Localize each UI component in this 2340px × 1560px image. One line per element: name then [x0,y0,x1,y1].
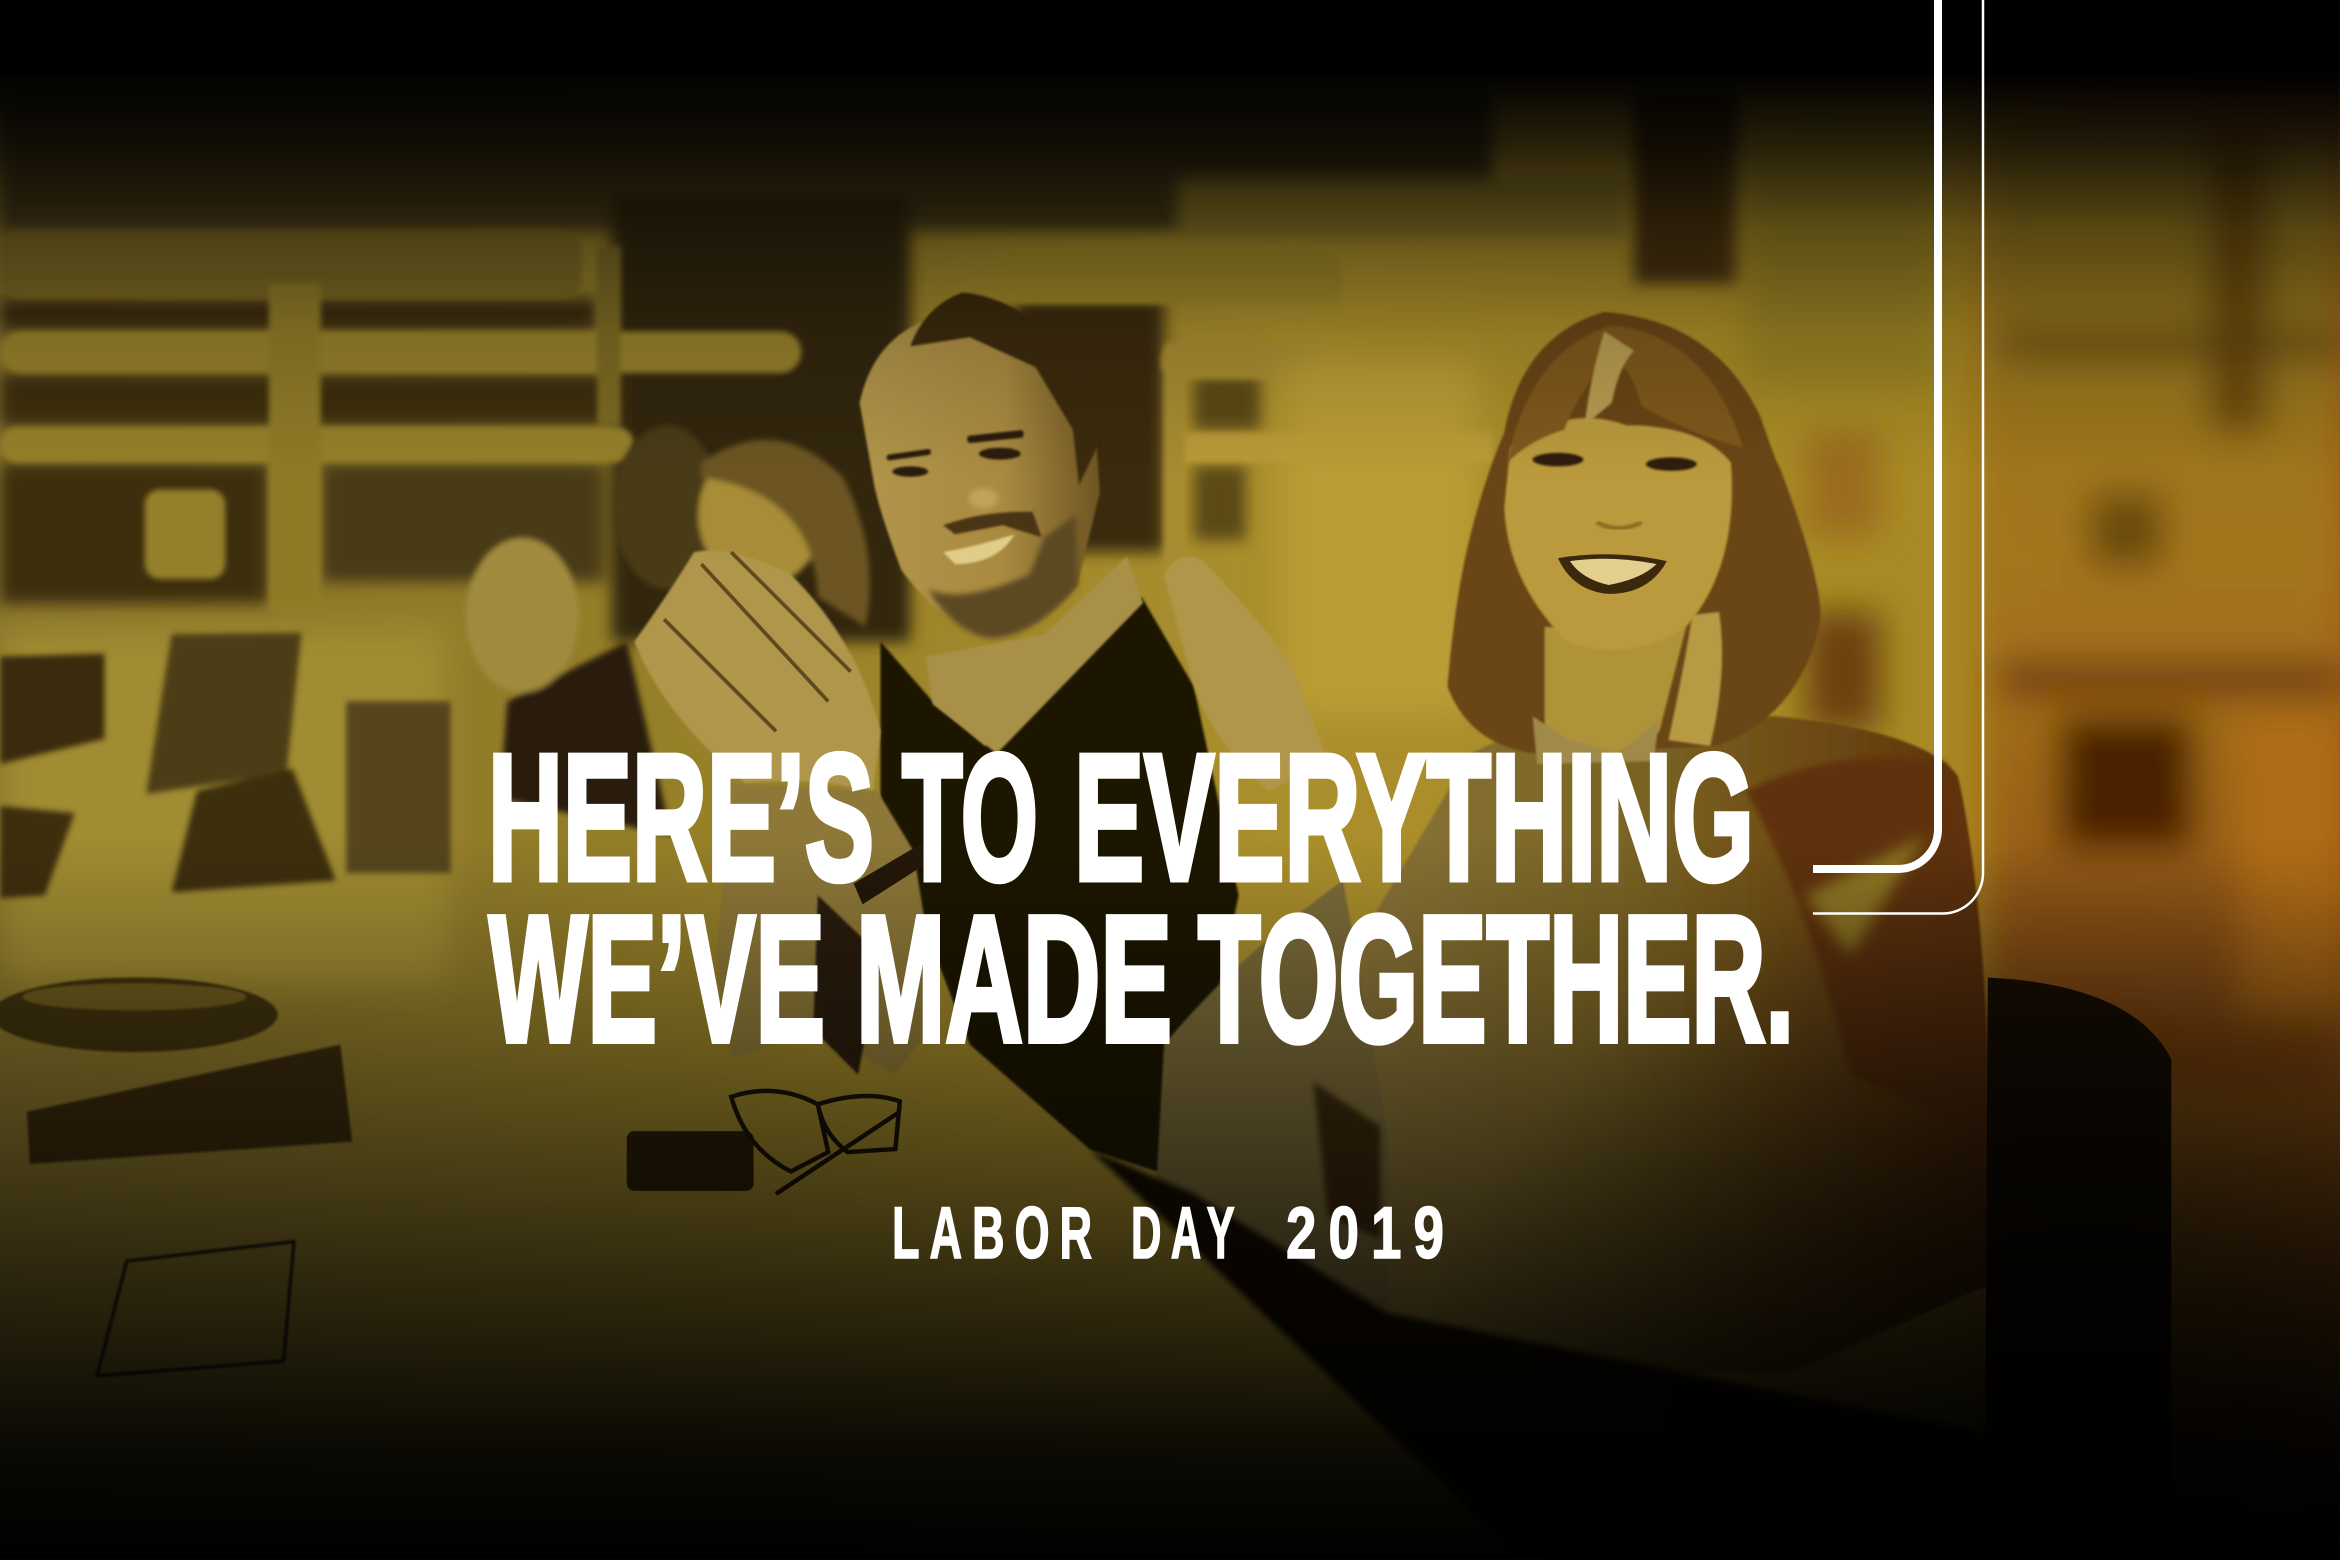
nose shadow [1597,522,1642,528]
sweater body [1343,716,1992,1373]
blurred office background [0,90,2340,1089]
hair highlight [1585,331,1634,425]
headline: MADE [856,879,1172,1080]
jacket pocket shadow [1313,1082,1380,1239]
headline: WE’VE [489,879,825,1080]
office chair [1985,977,2171,1559]
bracelet [854,843,928,904]
dark gap beside arm [813,895,880,1074]
vest and body [880,597,1239,1179]
decorative frame: thick rounded white line [1813,0,1938,869]
clapping hands [634,551,880,791]
background colleagues [466,425,870,836]
subtitle [892,1193,1456,1274]
headline: HERE’S [488,718,874,918]
forearm [716,783,940,1074]
beard [928,515,1077,639]
face [860,321,1100,639]
hair [1448,312,1821,754]
collar [1533,716,1659,764]
eyes and brows [886,430,1024,477]
chest highlight [1806,836,1925,955]
left desk items: tablets and plate [0,633,451,1376]
nose highlight [969,488,998,509]
shirt collar [925,557,1143,754]
headline: TO [902,718,1038,918]
left sleeve [1157,880,1388,1313]
raised hand [1668,612,1722,746]
subtitle: LABOR [892,1193,1102,1274]
subtitle: DAY [1131,1193,1244,1274]
headline: EVERYTHING [1074,718,1754,918]
hair [910,292,1098,485]
glasses and phone on the table [627,1091,900,1194]
smile [943,534,1015,564]
headline: TOGETHER. [1198,879,1794,1080]
moustache [943,512,1042,537]
decorative frame: thin rounded white line [1813,0,1983,914]
headline [488,718,1794,1080]
subtitle: 2019 [1286,1193,1456,1274]
shoulder shadow [1746,758,1985,1134]
eyes [1533,453,1697,471]
face [1504,418,1732,650]
woman [1157,312,1992,1373]
dark area beyond the table edge [1089,1149,1985,1559]
bangs [1507,325,1743,463]
smile [1558,554,1667,594]
neck [1545,627,1686,761]
man in vest [634,292,1239,1179]
